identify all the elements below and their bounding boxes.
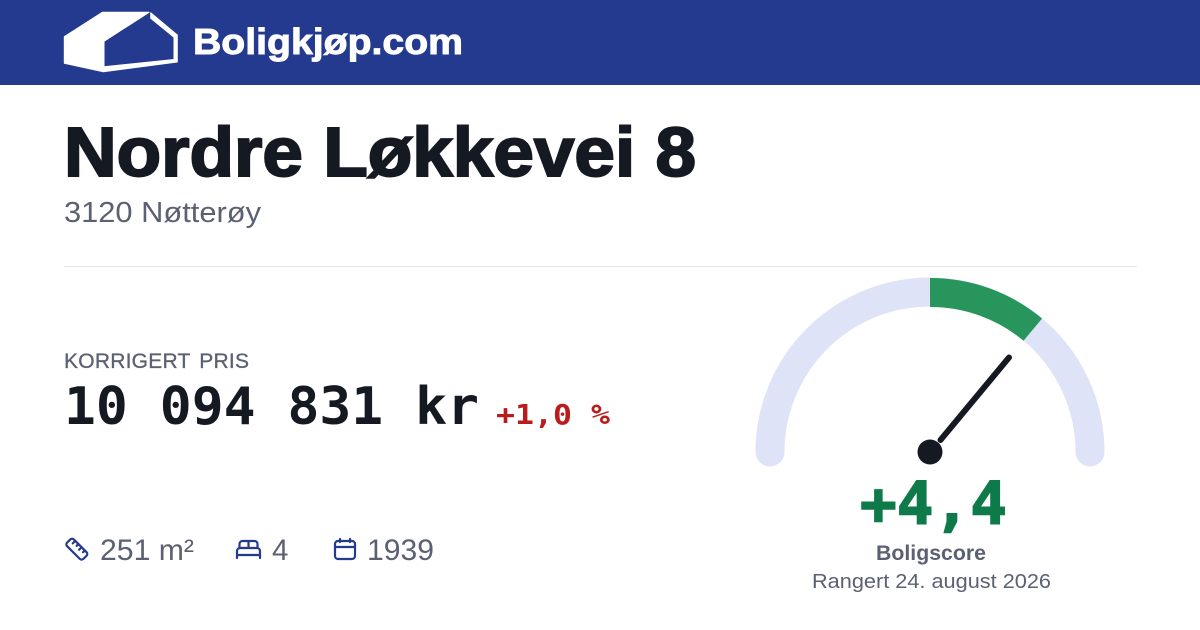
icon: ruler — [65, 538, 88, 561]
icon: calendar — [335, 539, 355, 559]
gauge — [770, 292, 1090, 464]
price change: +1,0 % — [496, 398, 610, 431]
title: Nordre Løkkevei 8 — [64, 113, 696, 191]
header bar — [0, 0, 1200, 85]
price label: KORRIGERT PRIS — [64, 350, 249, 373]
gauge needle — [940, 358, 1009, 440]
year built: 1939 — [367, 534, 434, 567]
area value: 251 m² — [100, 534, 194, 567]
property facts — [65, 534, 434, 567]
icon: bed — [237, 541, 260, 558]
price value: 10 094 831 kr — [64, 377, 479, 437]
gauge track — [770, 292, 1090, 452]
icon: house logo — [64, 12, 177, 72]
bedroom count: 4 — [272, 534, 288, 567]
needle hub — [918, 440, 942, 464]
ranking date: Rangert 24. august 2026 — [812, 570, 1051, 593]
score label: Boligscore — [876, 541, 986, 565]
score value: +4,4 — [860, 469, 1007, 538]
gauge value arc — [930, 292, 1033, 330]
subtitle: postal address: 3120 Nøtterøy — [64, 197, 262, 229]
brand name: Boligkjøp.com — [193, 21, 463, 62]
